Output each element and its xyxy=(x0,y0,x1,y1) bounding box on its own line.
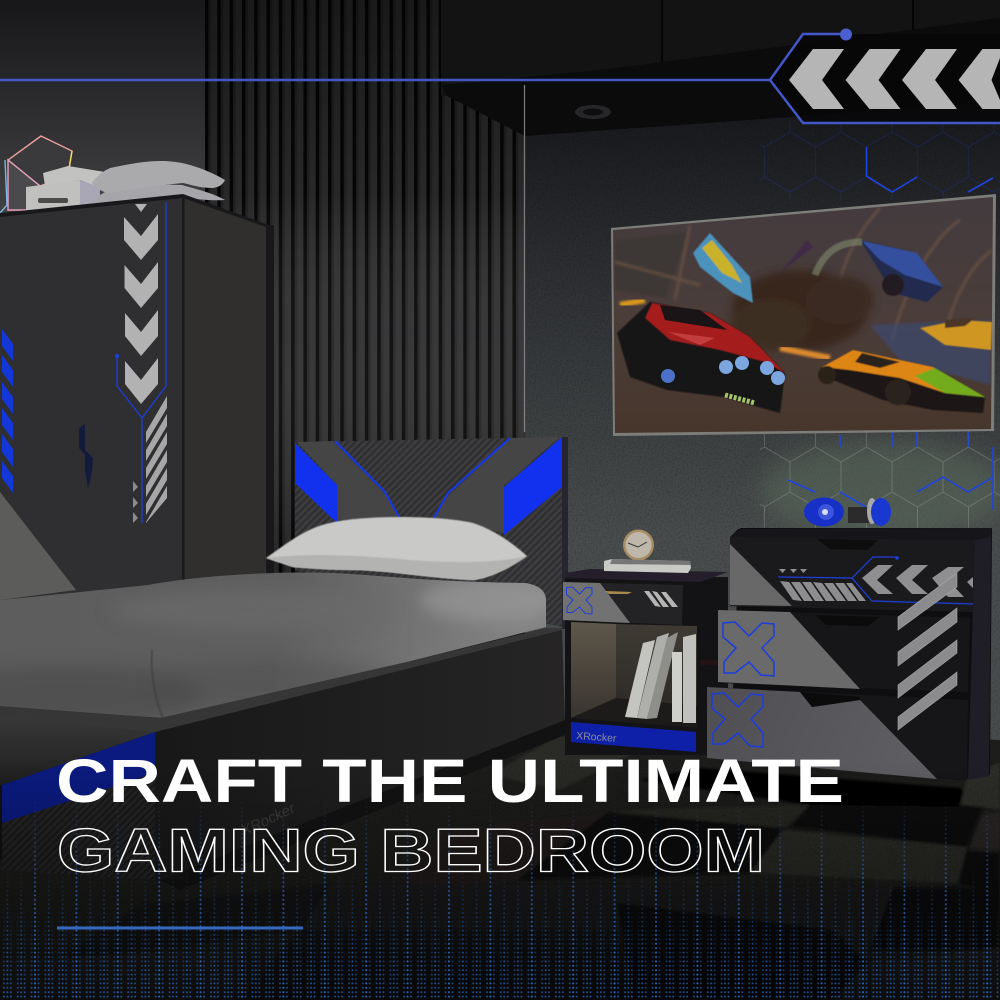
ceiling soffit xyxy=(441,0,1000,136)
title line one: CRAFT THE ULTIMATE xyxy=(56,747,844,815)
orange and green car xyxy=(818,350,985,413)
yellow car right xyxy=(920,318,992,350)
blue side stripes xyxy=(2,329,13,493)
headboard grey bands xyxy=(297,441,400,520)
clock xyxy=(623,530,654,560)
bed front left panel xyxy=(0,716,155,785)
headboard xyxy=(295,437,568,629)
hatched stripes xyxy=(146,396,167,523)
bed carbon corner xyxy=(2,773,155,880)
accent rule xyxy=(57,926,303,930)
storage boxes xyxy=(26,166,105,212)
dresser carcass xyxy=(730,528,992,780)
top xyxy=(565,569,728,582)
headphones xyxy=(804,498,891,526)
items on wardrobe: geometric ornament xyxy=(0,136,72,213)
right wall xyxy=(525,90,1000,750)
nightstand body xyxy=(565,577,728,755)
open shelf xyxy=(571,622,718,728)
floor carpet xyxy=(0,720,1000,1000)
honeycomb wall lights xyxy=(760,120,1000,540)
glass edge xyxy=(524,85,526,432)
duvet folds xyxy=(0,667,190,717)
drawer two xyxy=(718,610,970,692)
top chevron banner xyxy=(0,28,1000,123)
stacked pillows xyxy=(92,161,225,203)
stacked books on nightstand xyxy=(604,559,691,573)
room background xyxy=(0,0,1000,750)
wall poster: rocket car game art xyxy=(611,194,996,436)
blue base with logo: XRocker xyxy=(576,730,617,745)
drawer one xyxy=(730,537,975,612)
bed rail lip xyxy=(0,628,562,738)
nightstand drawer xyxy=(563,582,683,625)
door diagonal panel xyxy=(0,492,76,600)
pillow xyxy=(266,517,527,580)
red car xyxy=(617,300,830,413)
nightstand xyxy=(563,530,728,755)
circuit line xyxy=(117,202,166,523)
title xyxy=(56,747,844,884)
title line two: GAMING BEDROOM xyxy=(57,816,765,884)
bed xyxy=(0,437,568,890)
duvet xyxy=(0,572,546,718)
dresser hatch stripes xyxy=(898,573,957,730)
bottom darkening xyxy=(0,760,1000,1000)
poster arena and smoke xyxy=(615,208,992,385)
circuit line xyxy=(0,34,1000,123)
chevrons xyxy=(789,49,1000,109)
dresser xyxy=(707,498,992,780)
chevron column xyxy=(124,204,158,404)
wardrobe xyxy=(0,136,274,600)
left wall xyxy=(0,0,206,600)
bed brand mark: XRocker xyxy=(238,799,299,840)
blue flying car xyxy=(815,240,943,302)
blue base with logo xyxy=(571,722,696,752)
bed side rail xyxy=(155,630,565,880)
door handle xyxy=(79,424,93,489)
books on shelf xyxy=(625,632,696,723)
circuit dot xyxy=(840,28,852,40)
blue dot matrix xyxy=(0,795,1000,1000)
small triangles xyxy=(133,481,138,523)
bed blue corner xyxy=(2,732,155,823)
wardrobe body xyxy=(0,195,183,600)
smoke cloud xyxy=(730,270,874,351)
yellow and blue flying car xyxy=(693,233,813,303)
slatted wall panel xyxy=(205,0,525,600)
headboard blue panels xyxy=(295,443,337,523)
drawer three xyxy=(707,687,968,780)
